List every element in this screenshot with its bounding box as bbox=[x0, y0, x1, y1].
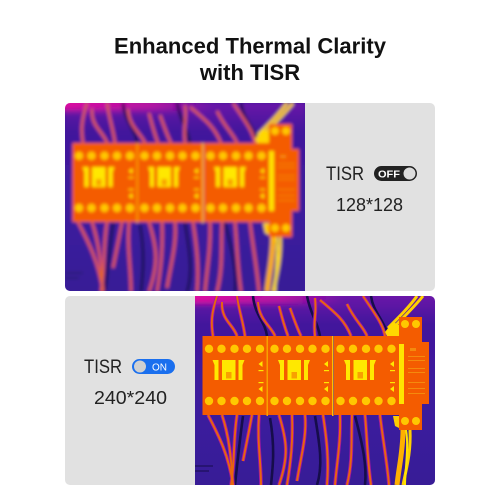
title: with TISR bbox=[199, 60, 300, 85]
title: Enhanced Thermal Clarity bbox=[114, 34, 387, 58]
thermal image: sharp 240*240 bbox=[195, 296, 435, 485]
title bbox=[114, 34, 387, 85]
resolution: 240*240: 240*240 bbox=[94, 387, 167, 408]
toggle: on bbox=[132, 359, 175, 374]
panel: TISR off bbox=[65, 103, 435, 291]
toggle: off bbox=[374, 166, 417, 181]
label: TISR off: TISR bbox=[326, 164, 364, 185]
thermal image: blurred 128*128 bbox=[65, 103, 305, 291]
toggle: on: ON bbox=[152, 362, 167, 374]
toggle: off: OFF bbox=[378, 170, 400, 180]
panel: TISR on bbox=[65, 296, 435, 485]
label: TISR on: TISR bbox=[84, 357, 122, 378]
resolution: 128*128: 128*128 bbox=[336, 194, 403, 215]
